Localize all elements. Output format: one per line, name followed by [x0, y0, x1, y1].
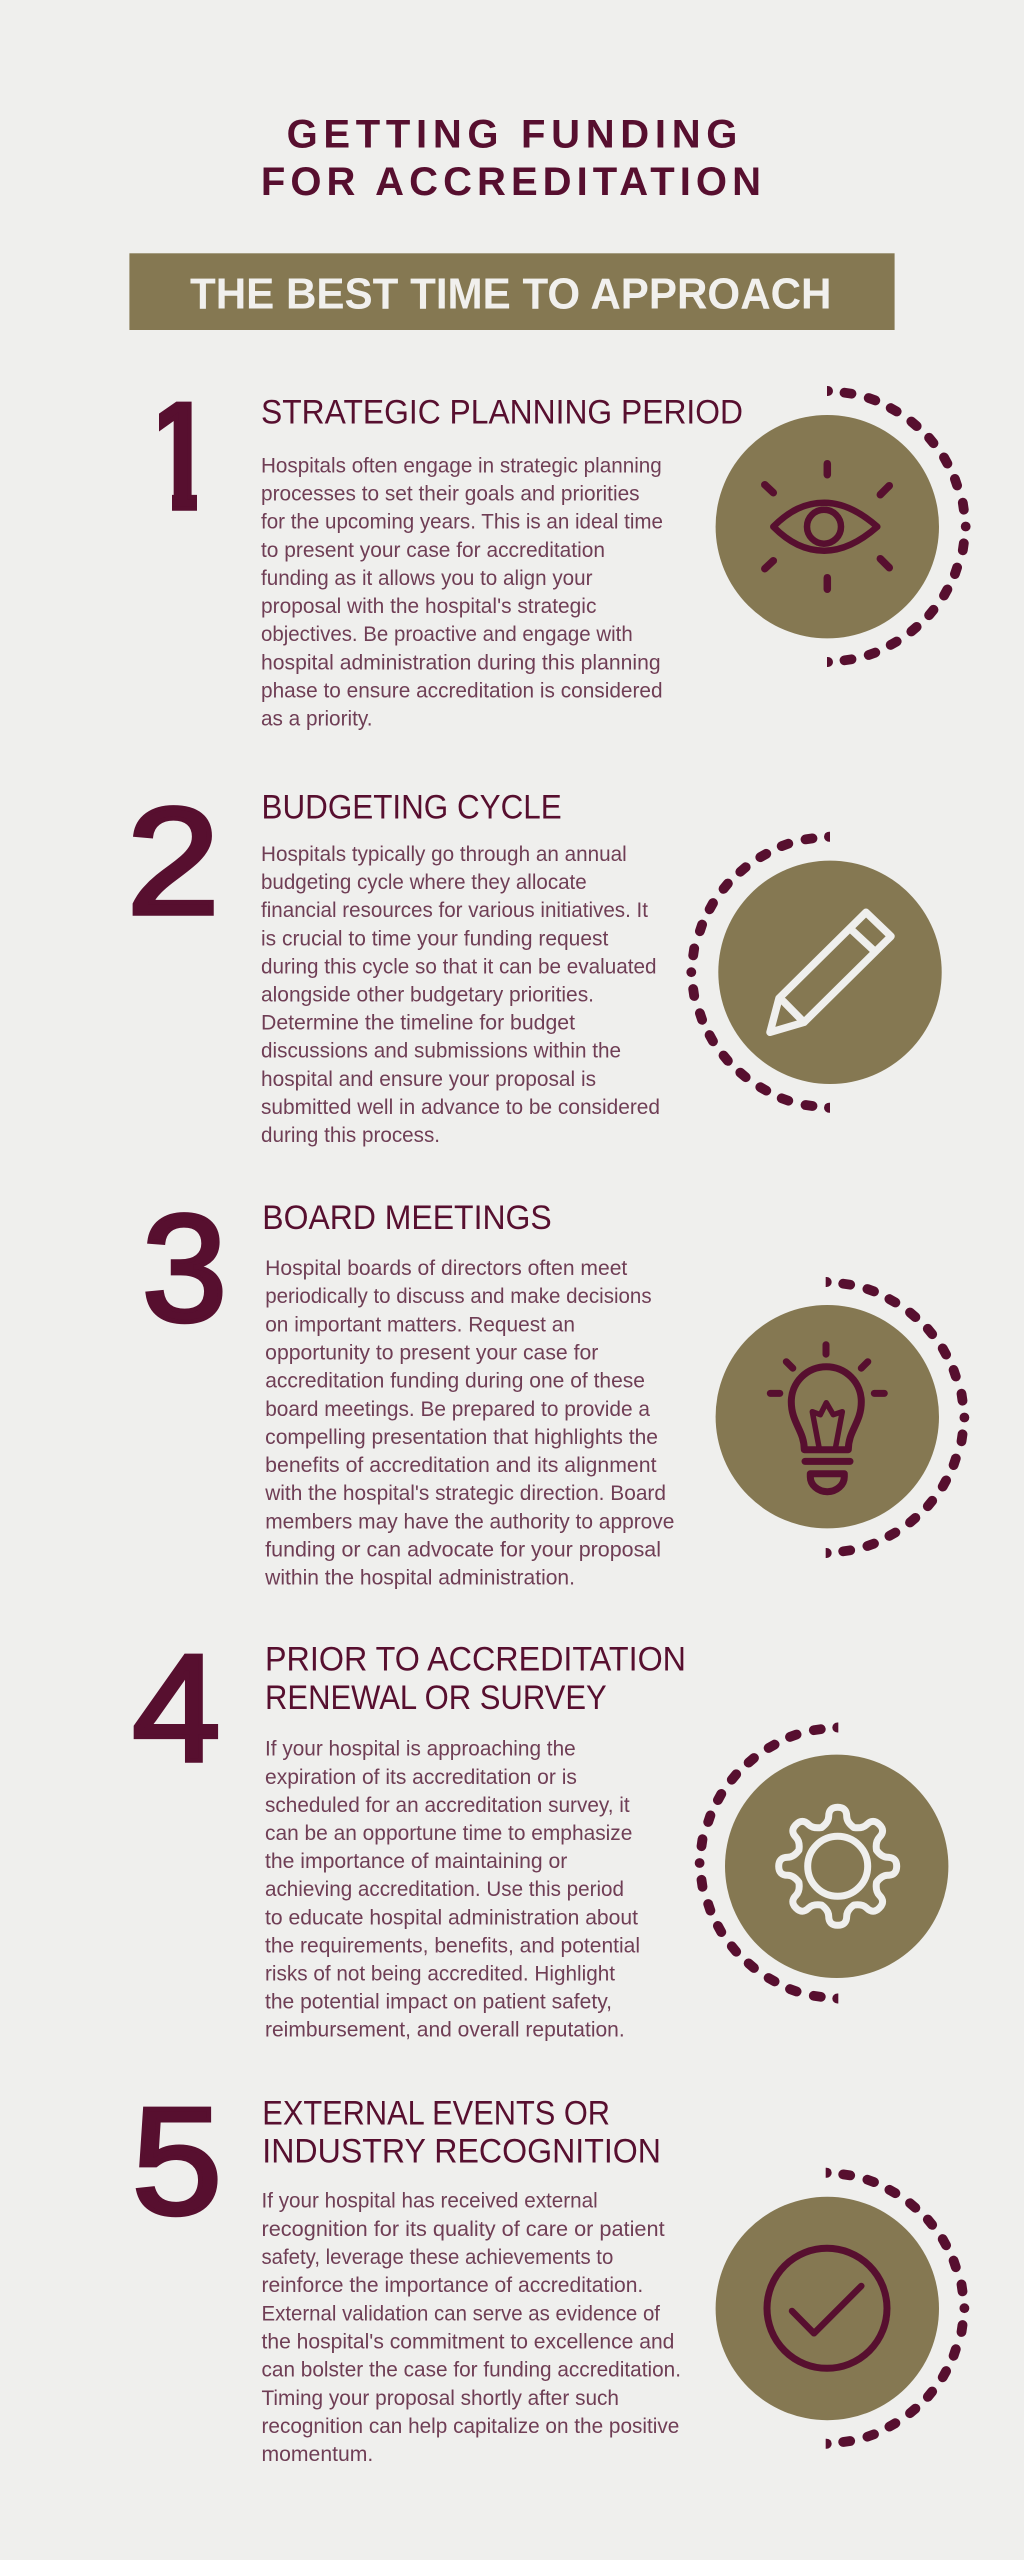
body text: external recognition: recognition can help capitalize on the positive [262, 2415, 679, 2438]
body text: board meetings: benefits of accreditation and its alignment [265, 1454, 657, 1477]
body text: board meetings: Hospital boards of directors often meet [265, 1257, 627, 1280]
body text: accreditation renewal: the potential impact on patient safety, [265, 1991, 612, 2014]
panel: external events or industry recognition [132, 2076, 969, 2466]
title [261, 112, 761, 204]
panel: budgeting cycle [127, 776, 942, 1147]
body text: external recognition: momentum. [262, 2443, 373, 2466]
number 2: 2 [127, 776, 220, 946]
body text: budgeting cycle: during this process. [261, 1124, 440, 1147]
body text: accreditation renewal: scheduled for an accreditation survey, it [265, 1794, 630, 1817]
banner: the best time to approach: THE BEST TIME TO APPROACH [190, 269, 832, 318]
heading: prior to accreditation renewal or survey: PRIOR TO ACCREDITATION [265, 1641, 686, 1679]
body text: board meetings: with the hospital's strategic direction. Board [264, 1482, 666, 1505]
body text: board meetings: board meetings. Be prepared to provide a [265, 1398, 650, 1421]
body text: external recognition [262, 2190, 681, 2466]
body text: board meetings: compelling presentation that highlights the [265, 1426, 658, 1449]
body text: external recognition: the hospital's commitment to excellence and [262, 2330, 674, 2354]
body text: accreditation renewal: If your hospital is approaching the [265, 1738, 576, 1761]
body text: budgeting cycle [261, 843, 660, 1147]
panel: prior to accreditation renewal or survey [132, 1624, 948, 2042]
body text: external recognition: recognition for its quality of care or patient [262, 2218, 665, 2241]
heading: strategic planning period: STRATEGIC PLANNING PERIOD [261, 393, 743, 431]
icon: light bulb in circle [716, 1277, 969, 1558]
body text: board meetings: members may have the authority to approve [265, 1510, 674, 1533]
body text: strategic planning: for the upcoming years. This is an ideal time [261, 511, 663, 534]
body text: external recognition: can bolster the case for funding accreditation. [262, 2359, 681, 2382]
heading: external events or industry recognition: EXTERNAL EVENTS OR [262, 2094, 610, 2132]
icon: gear in circle [695, 1722, 948, 2004]
title: FOR ACCREDITATION [261, 160, 761, 204]
body text: budgeting cycle: financial resources for various initiatives. It [261, 899, 648, 922]
body text: budgeting cycle: Determine the timeline for budget [261, 1012, 575, 1035]
heading: external events or industry recognition [262, 2094, 661, 2171]
body text: external recognition: External validation can serve as evidence of [262, 2302, 660, 2325]
heading: prior to accreditation renewal or survey: RENEWAL OR SURVEY [265, 1679, 607, 1717]
banner: the best time to approach [129, 253, 895, 330]
body text: strategic planning: to present your case for accreditation [261, 539, 605, 562]
body text: strategic planning: proposal with the hospital's strategic [261, 595, 596, 618]
heading: external events or industry recognition: INDUSTRY RECOGNITION [262, 2133, 661, 2171]
title: GETTING FUNDING [287, 112, 737, 156]
body text: budgeting cycle: hospital and ensure your proposal is [261, 1068, 596, 1091]
body text: accreditation renewal: the importance of maintaining or [265, 1850, 567, 1873]
heading: budgeting cycle: BUDGETING CYCLE [262, 788, 562, 826]
body text: board meetings [264, 1257, 674, 1590]
body text: strategic planning: processes to set their goals and priorities [261, 482, 640, 506]
body text: accreditation renewal: expiration of its accreditation or is [265, 1766, 577, 1789]
number 5: 5 [132, 2076, 222, 2246]
body text: board meetings: within the hospital administration. [264, 1567, 575, 1590]
icon: check mark in circle [716, 2168, 969, 2449]
body text: accreditation renewal: to educate hospital administration about [265, 1906, 638, 1929]
body text: external recognition: safety, leverage these achievements to [262, 2246, 613, 2269]
body text: external recognition: Timing your proposal shortly after such [262, 2387, 619, 2410]
body text: board meetings: accreditation funding during one of these [265, 1370, 645, 1393]
body text: budgeting cycle: is crucial to time your funding request [261, 927, 608, 950]
number 3: 3 [142, 1184, 227, 1354]
body text: strategic planning [261, 454, 663, 731]
body text: board meetings: opportunity to present your case for [265, 1342, 598, 1364]
body text: budgeting cycle: budgeting cycle where they allocate [261, 871, 587, 894]
body text: budgeting cycle: submitted well in advance to be considered [261, 1096, 660, 1119]
body text: accreditation renewal: risks of not being accredited. Highlight [265, 1962, 615, 1986]
body text: accreditation renewal: can be an opportune time to emphasize [265, 1822, 632, 1845]
icon: eye in circle [716, 386, 971, 667]
body text: external recognition: If your hospital has received external [262, 2190, 598, 2213]
body text: strategic planning: Hospitals often engage in strategic planning [261, 454, 662, 477]
body text: board meetings: funding or can advocate for your proposal [265, 1538, 661, 1562]
body text: accreditation renewal: achieving accreditation. Use this period [265, 1878, 624, 1901]
body text: strategic planning: hospital administration during this planning [261, 651, 661, 674]
body text: strategic planning: as a priority. [261, 708, 372, 731]
body text: strategic planning: funding as it allows you to align your [261, 567, 592, 590]
number 1: 1 [138, 372, 222, 542]
body text: budgeting cycle: during this cycle so that it can be evaluated [261, 955, 656, 978]
heading: board meetings: BOARD MEETINGS [262, 1199, 552, 1237]
body text: accreditation renewal [265, 1738, 640, 2042]
body text: accreditation renewal: the requirements, benefits, and potential [265, 1934, 640, 1957]
number 4: 4 [132, 1624, 220, 1794]
icon: pencil in circle [686, 832, 942, 1113]
body text: external recognition: reinforce the importance of accreditation. [262, 2274, 643, 2297]
body text: budgeting cycle: discussions and submissions within the [261, 1040, 621, 1063]
body text: budgeting cycle: Hospitals typically go through an annual [261, 843, 627, 866]
body text: board meetings: periodically to discuss and make decisions [265, 1285, 652, 1308]
panel: strategic planning period [138, 372, 971, 731]
body text: accreditation renewal: reimbursement, and overall reputation. [265, 2019, 625, 2042]
body text: budgeting cycle: alongside other budgetary priorities. [261, 984, 594, 1006]
panel: board meetings [142, 1184, 969, 1590]
body text: strategic planning: objectives. Be proactive and engage with [261, 623, 633, 646]
body text: board meetings: on important matters. Request an [265, 1313, 575, 1336]
heading: prior to accreditation renewal or survey [265, 1641, 686, 1717]
body text: strategic planning: phase to ensure accreditation is considered [261, 680, 663, 702]
